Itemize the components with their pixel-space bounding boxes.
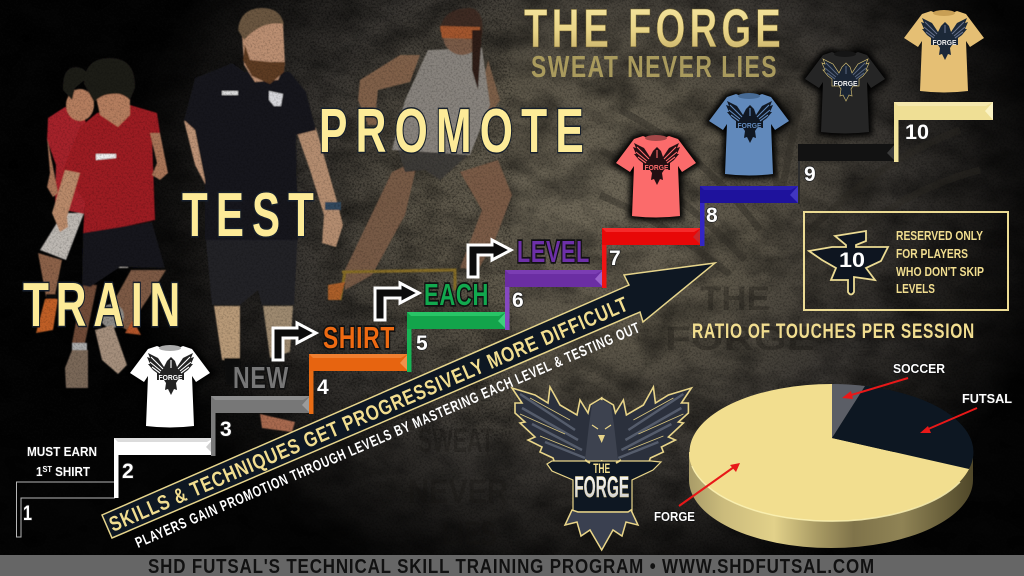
heading: TEST: TEST (182, 181, 322, 250)
step numbers: 1 (23, 502, 32, 525)
step 9 black (798, 144, 895, 204)
shirt: gold (904, 10, 984, 92)
pie label: forge: FORGE (654, 510, 695, 524)
word: LEVEL: LEVEL (517, 234, 590, 269)
slice: futsal (832, 386, 973, 469)
arrow: to EACH (375, 283, 419, 320)
shirt: coral: FORGE (644, 165, 669, 172)
step 1 (16, 482, 115, 537)
shirt: blue (709, 93, 789, 176)
label: must earn first shirt: ST (42, 465, 52, 474)
arrow: to SHIRT (273, 323, 316, 360)
background texture: NEVER (408, 473, 508, 511)
background texture: FORGE (665, 320, 815, 358)
photo: coach (184, 8, 343, 432)
arrow: to LEVEL (468, 240, 511, 277)
step numbers: 6 (512, 289, 524, 312)
shirt: coral (616, 135, 696, 218)
step numbers: 5 (416, 332, 428, 355)
callout text: RESERVED ONLY (896, 229, 984, 243)
callout: level 10 reserved (804, 212, 1008, 310)
photo grain overlay (0, 0, 512, 440)
step 10 cream (894, 102, 993, 162)
step 4 orange (309, 354, 408, 414)
icon: anvil with 10 (809, 231, 888, 294)
background texture: LIES (442, 515, 497, 553)
shirt: black (805, 51, 885, 134)
shirt: white: FORGE (158, 375, 183, 382)
arrow headline: SKILLS & TECHNIQUES GET PROGRESSIVELY MORE DIFFICULT (106, 293, 632, 537)
step numbers: 7 (609, 247, 621, 270)
label: must earn first shirt (27, 445, 97, 479)
pie label: futsal (920, 392, 1012, 433)
step numbers: 9 (804, 163, 816, 186)
word: EACH: EACH (424, 277, 489, 312)
logo: the forge eagle: THE (593, 460, 610, 476)
callout text: FOR PLAYERS (896, 247, 968, 261)
callout text: WHO DON'T SKIP (896, 265, 984, 279)
icon: anvil with 10: 10 (839, 249, 865, 272)
pie label: soccer (842, 362, 945, 399)
pie label: soccer: SOCCER (893, 362, 945, 376)
diagonal progress arrow (102, 263, 715, 538)
shirt: black: FORGE (834, 81, 858, 88)
step 3 gray (211, 396, 310, 456)
background texture: THE (700, 280, 770, 318)
label: must earn first shirt: MUST EARN (27, 445, 97, 459)
slice: forge (690, 384, 969, 520)
shirt: gold: FORGE (932, 40, 957, 47)
step 5 green (407, 312, 506, 372)
subtitle: SWEAT NEVER LIES: SWEAT NEVER LIES (531, 49, 778, 84)
front child (52, 58, 168, 388)
callout text (896, 229, 984, 296)
photo: woman athlete (328, 8, 512, 300)
logo: the forge eagle: FORGE (574, 471, 629, 504)
pie chart (689, 384, 973, 548)
step numbers: 3 (220, 418, 232, 441)
step numbers: 8 (706, 204, 718, 227)
pie label: futsal: FUTSAL (962, 392, 1012, 406)
pie label: forge (654, 463, 740, 524)
callout text: LEVELS (896, 282, 935, 296)
step numbers (23, 121, 929, 525)
label: must earn first shirt: 1 (36, 465, 43, 479)
word: NEW: NEW (233, 360, 289, 395)
word: SHIRT: SHIRT (323, 320, 395, 355)
step 2 white (114, 438, 214, 498)
background texture: SWEAT (418, 422, 494, 460)
step 6 purple (505, 270, 603, 330)
slice: soccer (832, 384, 865, 438)
heading: PROMOTE: PROMOTE (319, 97, 592, 166)
back child (36, 67, 128, 333)
label: must earn first shirt: SHIRT (52, 465, 90, 479)
step 8 blue (700, 186, 798, 246)
step numbers: 2 (122, 460, 134, 483)
heading: TRAIN: TRAIN (23, 271, 187, 340)
logo: the forge eagle (512, 387, 691, 550)
step 7 red (602, 228, 701, 288)
shirt: blue: FORGE (738, 123, 762, 130)
shirt: white (130, 345, 210, 428)
step numbers: 4 (317, 376, 329, 399)
step numbers: 10 (905, 121, 929, 144)
photo: two children training (36, 58, 168, 388)
arrow subtext: PLAYERS GAIN PROMOTION THROUGH LEVELS BY MASTERING EACH LEVEL & TESTING OUT (133, 319, 643, 552)
